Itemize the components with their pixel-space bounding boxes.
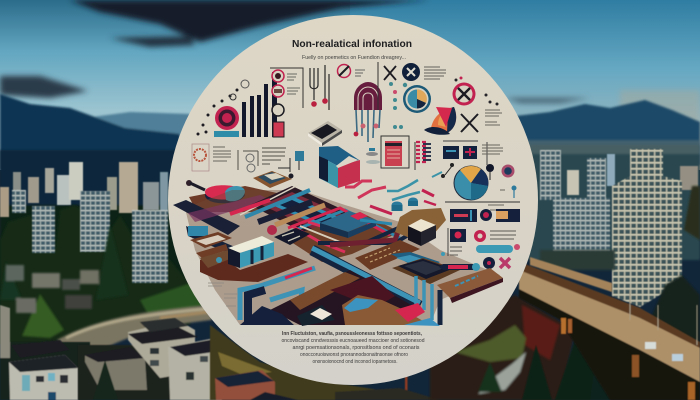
- dark pads: [274, 228, 310, 245]
- river and bank: [430, 295, 575, 400]
- mountains right: [515, 100, 700, 165]
- icon: black circle X: [402, 63, 420, 81]
- small blue box: [295, 151, 304, 170]
- dark clouds: [0, 0, 590, 103]
- bottom paragraph: [282, 331, 425, 365]
- text block right: [485, 110, 502, 125]
- forest between towers: [0, 205, 205, 345]
- bottom paragraph: ononsoionocnd ond inconod ioparnetoss.: [312, 359, 398, 365]
- sky background: [0, 0, 700, 170]
- chip stack icon: [308, 121, 342, 146]
- icon: X mark: [384, 66, 396, 80]
- dark chip with brown base: [392, 258, 460, 284]
- isometric cube: [319, 146, 360, 188]
- subtitle: Fuelly on poemetics on Fuendion dreagrey...: [302, 55, 406, 61]
- foreground apartments middle: [78, 318, 228, 400]
- bottom paragraph: onoccoruoiswonst pnorannodsonaitnsonse ofnoro: [300, 352, 408, 358]
- barrels: [370, 198, 436, 214]
- bridge highway: [519, 257, 700, 400]
- dotted chain: [196, 80, 249, 136]
- small panels: [443, 141, 503, 165]
- blue channels lower: [240, 268, 440, 325]
- warning icons column: [272, 70, 284, 137]
- thin text labels left of plan: [208, 283, 238, 306]
- bottom paragraph: anrgi poemsationsonals, rponsitlsons ond of oconaris: [292, 345, 420, 351]
- cream cube upper right: [395, 208, 446, 246]
- right legend panels: [445, 202, 520, 256]
- trees and houses left: [0, 225, 207, 338]
- bar chart: [242, 72, 277, 137]
- right trees: [540, 186, 700, 345]
- vertical arrows: [278, 158, 290, 172]
- foreground towers left: [32, 191, 168, 283]
- icon: circular target left: [214, 106, 239, 137]
- icon: crossed tools: [461, 114, 478, 132]
- bottom paragraph: Inn Fluctuiston, vaufia, psnoussleonesss fottsso sepoentiots,: [282, 331, 422, 337]
- icon: pink circle cross: [452, 82, 476, 106]
- chart barcode: [415, 142, 431, 170]
- small teal dots: [389, 82, 407, 129]
- flow diagram pink: [345, 172, 442, 200]
- left towers: [0, 162, 168, 217]
- text lines column: [270, 68, 303, 108]
- building white-topped left: [200, 236, 308, 282]
- mid brown strip: [355, 240, 440, 272]
- isometric blue building: [320, 211, 376, 238]
- distant city and forest bands: [0, 140, 700, 325]
- foreground conifers: [522, 325, 700, 400]
- capsule legend: [439, 252, 510, 271]
- fingerprint motif: [354, 82, 382, 142]
- icon: crossed pink circle: [338, 64, 365, 78]
- isometric left platform with pie: [186, 171, 300, 212]
- fork diagrams: [310, 65, 329, 110]
- text block upper right: [424, 67, 446, 79]
- infographic disc: [168, 15, 538, 385]
- vertical divider: [377, 62, 379, 110]
- mountains left: [0, 94, 190, 170]
- bottom paragraph: oncoviscand cnndvesssis eucnoaueed rnaccioer ond sotionesod: [282, 338, 425, 344]
- large pie chart: [454, 166, 488, 200]
- pie with base: [424, 107, 456, 135]
- foreground apartments left: [0, 305, 90, 400]
- decorative dots right: [454, 76, 498, 106]
- small capsules: [366, 148, 380, 164]
- left text icons: [192, 144, 286, 172]
- donut chart: [403, 85, 431, 113]
- text lines right middle: [488, 190, 510, 210]
- right towers: [540, 149, 698, 307]
- lower brown plaza with pool: [240, 268, 440, 326]
- bottom centre ground and houses: [210, 325, 440, 400]
- title: Non-realatical infonation: [292, 38, 412, 50]
- phone diagram: [381, 136, 409, 168]
- left highway: [57, 305, 212, 362]
- central isometric city plan: [173, 184, 500, 325]
- lower right platform: [437, 268, 503, 303]
- long diagonal blue channel: [312, 220, 420, 306]
- pins and small icons right: [441, 163, 516, 198]
